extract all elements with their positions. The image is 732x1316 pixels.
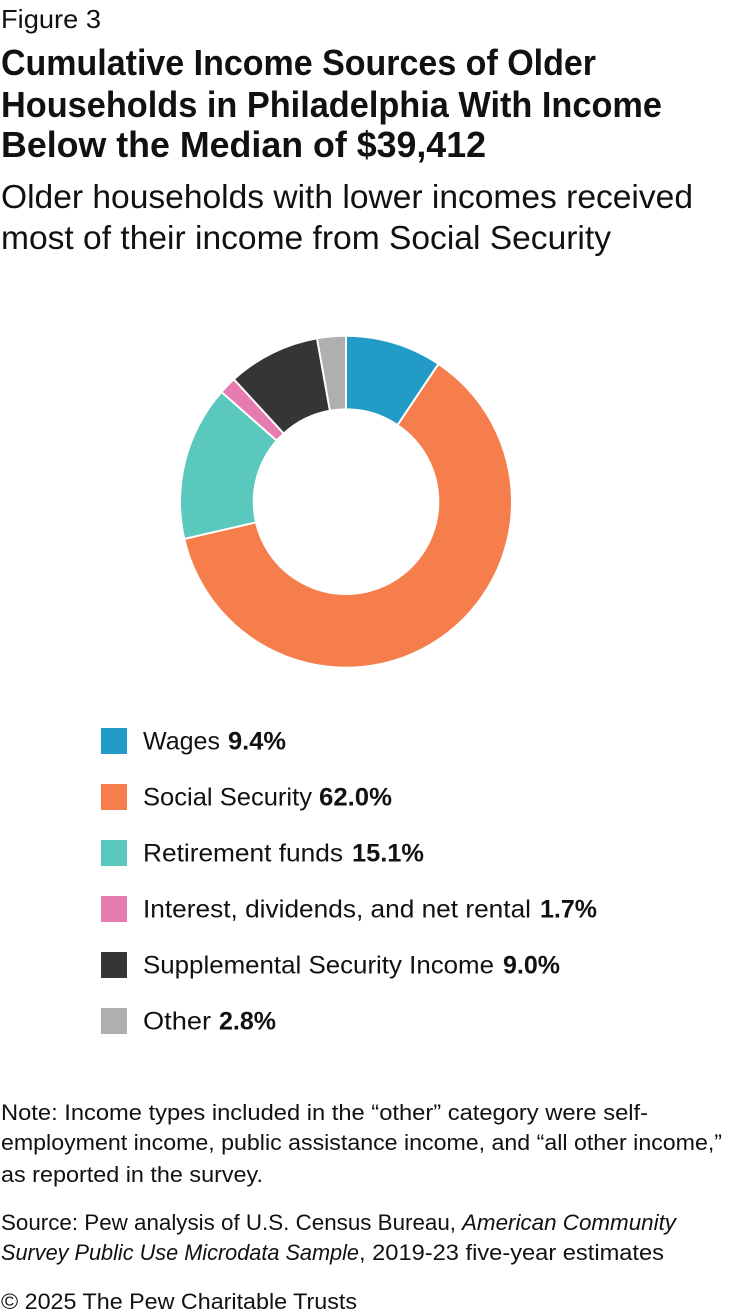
source (1, 1210, 678, 1265)
source: Survey Public Use Microdata Sample (1, 1240, 359, 1265)
copyright: © 2025 The Pew Charitable Trusts (1, 1289, 357, 1314)
legend item: Social Security (101, 784, 392, 812)
legend item: Wages: 9.4% (228, 728, 286, 756)
figure label: Figure 3 (1, 4, 101, 34)
slice: Retirement funds 15.1% (181, 393, 276, 539)
legend item: Social Security: 62.0% (319, 784, 392, 812)
legend item: Wages (101, 728, 286, 756)
slice: Supplemental Security Income 9.0% (234, 339, 330, 433)
title: Cumulative Income Sources of Older (1, 42, 596, 83)
legend item: Wages: Wages (143, 728, 220, 756)
legend item: Other: 2.8% (219, 1008, 276, 1036)
legend item: Retirement funds: Retirement funds (143, 840, 343, 868)
source: Source: Pew analysis of U.S. Census Bureau, (1, 1210, 456, 1235)
source: American Community (460, 1210, 678, 1235)
title: Households in Philadelphia With Income (1, 84, 662, 125)
note: Note: Income types included in the “other” category were self- (1, 1100, 648, 1125)
note: as reported in the survey. (1, 1162, 263, 1187)
legend item: Supplemental Security Income: 9.0% (503, 952, 560, 980)
legend item: Retirement funds (101, 840, 424, 868)
subtitle (1, 178, 693, 256)
legend item: Social Security: Social Security (143, 784, 312, 812)
note (1, 1100, 722, 1187)
donut chart (181, 335, 511, 667)
legend item: Other: Other (143, 1008, 211, 1036)
slice: Interest, dividends, and net rental 1.7% (222, 380, 283, 440)
subtitle: most of their income from Social Security (1, 219, 611, 256)
slice: Other 2.8% (317, 337, 346, 410)
note: employment income, public assistance income, and “all other income,” (1, 1130, 722, 1155)
title (1, 42, 662, 165)
legend item: Interest, dividends, and net rental: Interest, dividends, and net rental (143, 896, 531, 924)
slice: Wages 9.4% (346, 337, 438, 424)
source: , 2019-23 five-year estimates (359, 1240, 664, 1265)
legend item: Retirement funds: 15.1% (352, 840, 424, 868)
legend item: Other (101, 1008, 276, 1036)
slice: Social Security 62.0% (185, 365, 511, 667)
subtitle: Older households with lower incomes received (1, 178, 693, 215)
legend (101, 728, 597, 1036)
legend item: Interest, dividends, and net rental: 1.7% (540, 896, 597, 924)
title: Below the Median of $39,412 (1, 124, 486, 165)
legend item: Supplemental Security Income: Supplemental Security Income (143, 952, 494, 980)
